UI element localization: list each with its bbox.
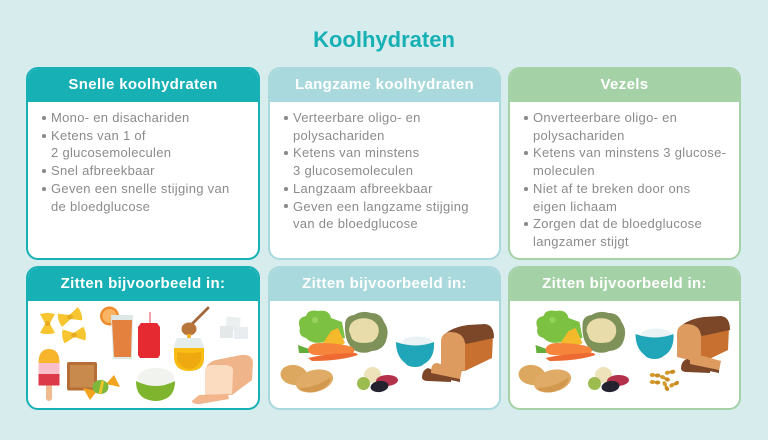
panel: langzame koolhydraten	[268, 67, 501, 260]
heading: snelle koolhydraten	[26, 67, 260, 102]
text block: snelle koolhydraten: Mono- en disachariden	[51, 110, 190, 125]
text block: vezels: moleculen	[533, 163, 595, 178]
heading: langzame koolhydraten	[268, 67, 501, 102]
icon: sugar cubes	[220, 316, 248, 339]
text block: langzame koolhydraten: Geven een langzame stijging	[293, 198, 469, 214]
panel: voorbeelden langzame koolhydraten	[268, 266, 501, 410]
icon: vegetables, vezels	[536, 311, 625, 361]
heading: zitten bijvoorbeeld in, snel	[26, 266, 260, 301]
icon: ice lolly	[38, 349, 60, 401]
heading: zitten bijvoorbeeld in, langzaam	[268, 266, 501, 301]
heading: zitten bijvoorbeeld in, vezels	[508, 266, 741, 301]
text block: snelle koolhydraten	[42, 110, 230, 214]
icon: brown bread, vezels	[677, 316, 730, 373]
icon: biscuit	[67, 362, 97, 390]
icon: beans, vezels	[588, 367, 629, 393]
icon: brown bread with slices	[422, 324, 494, 382]
icon: sliced white bread	[192, 355, 253, 404]
text block: langzame koolhydraten: polysachariden	[293, 128, 385, 143]
text block: langzame koolhydraten: Verteerbare oligo- en	[293, 110, 421, 125]
text block: vezels: langzamer stijgt	[533, 234, 629, 249]
icon: bowl of rice	[136, 368, 175, 401]
icon: wrapped candy	[83, 375, 120, 400]
icon: bowl of rice, vezels	[636, 328, 674, 359]
text block: snelle koolhydraten: Ketens van 1 of	[51, 128, 146, 143]
text block: snelle koolhydraten: de bloedglucose	[51, 198, 150, 214]
heading: zitten bijvoorbeeld in, langzaam: Zitten bijvoorbeeld in:	[302, 275, 467, 292]
icon: orange juice glass	[100, 306, 133, 359]
heading: langzame koolhydraten: Langzame koolhydraten	[295, 76, 474, 93]
text block: vezels: polysachariden	[533, 128, 625, 143]
heading: vezels	[508, 67, 741, 102]
text block: langzame koolhydraten: Langzaam afbreekbaar	[293, 181, 433, 196]
heading: zitten bijvoorbeeld in, vezels: Zitten bijvoorbeeld in:	[542, 275, 707, 292]
icon: soda can with straw	[138, 312, 160, 358]
panel: vezels	[508, 67, 741, 260]
icon: potatoes, langzaam	[279, 363, 336, 396]
icon: raisins	[650, 369, 680, 392]
icon: beans, langzaam	[357, 367, 398, 393]
icon: vegetables, langzaam	[298, 311, 388, 361]
text block: vezels: Zorgen dat de bloedglucose	[533, 216, 702, 231]
text block: vezels: Onverteerbare oligo- en	[533, 110, 677, 125]
text block: snelle koolhydraten: Snel afbreekbaar	[51, 163, 155, 178]
text block: vezels: eigen lichaam	[533, 198, 617, 214]
text block: langzame koolhydraten	[284, 110, 469, 231]
icon: farfalle pasta	[40, 307, 87, 344]
panel: snelle koolhydraten	[26, 67, 260, 260]
text block: vezels: Niet af te breken door ons	[533, 181, 690, 196]
heading: vezels: Vezels	[600, 76, 648, 93]
text block: langzame koolhydraten: 3 glucosemoleculen	[293, 163, 413, 178]
panel: voorbeelden vezels	[508, 266, 741, 410]
icon: honey jar with dipper	[174, 308, 208, 371]
heading: snelle koolhydraten: Snelle koolhydraten	[68, 76, 218, 93]
text block: langzame koolhydraten: van de bloedglucose	[293, 216, 418, 231]
text block: snelle koolhydraten: Geven een snelle stijging van	[51, 181, 230, 196]
heading: zitten bijvoorbeeld in, snel: Zitten bijvoorbeeld in:	[61, 275, 225, 292]
icon: potatoes, vezels	[517, 363, 574, 396]
text block: langzame koolhydraten: Ketens van minstens	[293, 145, 419, 160]
text block: snelle koolhydraten: 2 glucosemoleculen	[51, 145, 171, 160]
panel: voorbeelden snelle koolhydraten	[26, 266, 260, 410]
text block: vezels: Ketens van minstens 3 glucose-	[533, 145, 726, 160]
text block: vezels	[524, 110, 726, 249]
icon: bowl of rice, langzaam	[396, 336, 434, 367]
title: Koolhydraten	[313, 27, 455, 52]
